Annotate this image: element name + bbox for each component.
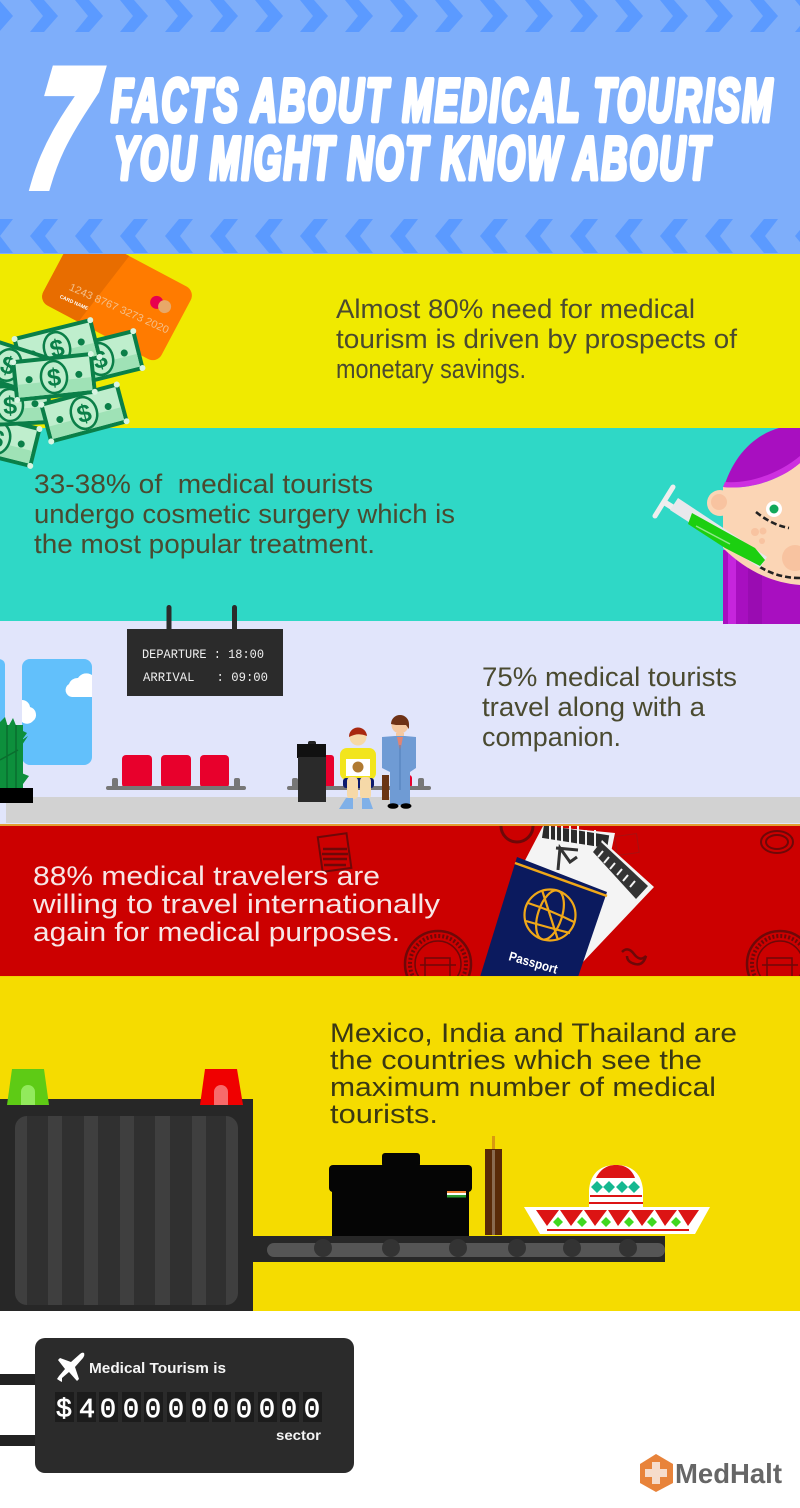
digit counter: 0 xyxy=(100,1396,116,1426)
digit counter: 0 xyxy=(145,1396,161,1426)
text: sector: sector xyxy=(276,1427,322,1443)
green beacon xyxy=(7,1069,49,1105)
passport xyxy=(480,857,607,977)
conveyor belt xyxy=(253,1236,665,1262)
text: destinations fact: tourists. xyxy=(330,1099,438,1129)
baggage scanner xyxy=(0,1069,253,1311)
departure board: ARRIVAL : 09:00 xyxy=(143,670,268,685)
panel: header xyxy=(0,0,800,254)
text: savings fact xyxy=(336,294,738,384)
text: companion fact: 75% medical tourists xyxy=(482,662,737,692)
logo wordmark: MedHalt xyxy=(675,1458,782,1489)
icon: airplane xyxy=(57,1353,84,1382)
device straps xyxy=(0,1374,36,1446)
icon: credit card: 1243 8767 3273 2020 xyxy=(67,281,171,336)
text: cosmetic surgery fact: undergo cosmetic surgery which is xyxy=(34,499,455,529)
panel: repeat travel xyxy=(0,826,800,977)
text: cosmetic surgery fact: 33-38% of medical tourists xyxy=(34,469,373,499)
bench: empty seats xyxy=(106,755,246,790)
departure board xyxy=(127,605,283,696)
text: companion fact: companion. xyxy=(482,722,621,752)
digit counter: 0 xyxy=(213,1396,229,1426)
text: repeat travel fact: again for medical purposes. xyxy=(33,917,400,947)
digit counter: 0 xyxy=(259,1396,275,1426)
text: repeat travel fact xyxy=(32,861,441,947)
text: companion fact: travel along with a xyxy=(482,692,706,722)
digit counter: 0 xyxy=(191,1396,207,1426)
icon: credit card xyxy=(42,254,192,360)
icon: hexagon cross xyxy=(640,1454,673,1492)
text: companion fact xyxy=(482,662,737,752)
black suitcase with flag xyxy=(329,1153,472,1236)
red beacon xyxy=(200,1069,243,1105)
passport stamps xyxy=(316,826,800,976)
title numeral 7: 7 xyxy=(20,36,108,221)
digit counter: 0 xyxy=(168,1396,184,1426)
digit counter: 0 xyxy=(123,1396,139,1426)
digit counter: 4 xyxy=(79,1396,95,1426)
text: destinations fact xyxy=(330,1018,737,1129)
plant xyxy=(0,717,33,803)
text: cosmetic surgery fact: the most popular treatment. xyxy=(34,529,375,559)
digit counter: 0 xyxy=(304,1396,320,1426)
digit counter xyxy=(55,1392,322,1426)
icon: credit card: CARD NAME xyxy=(59,294,89,312)
icon: banknotes xyxy=(0,316,146,470)
text: repeat travel fact: 88% medical travelers are xyxy=(33,861,380,891)
top chevron row xyxy=(0,0,800,32)
bottom chevron row xyxy=(0,219,800,253)
title line 2: YOU MIGHT NOT KNOW ABOUT xyxy=(114,126,712,192)
panel: waiting lounge xyxy=(0,605,800,826)
text: repeat travel fact: willing to travel internationally xyxy=(32,889,441,919)
windows with clouds xyxy=(0,659,92,766)
bench: occupied xyxy=(287,755,431,790)
panel: cosmetic surgery xyxy=(0,425,800,624)
text: cosmetic surgery fact xyxy=(34,469,455,559)
text: destinations fact: Mexico, India and Thailand are xyxy=(330,1018,737,1048)
text: savings fact: tourism is driven by prospects of xyxy=(336,324,738,354)
passport: Passport xyxy=(507,948,560,977)
panel: sector value device xyxy=(0,1338,354,1473)
digit counter: 0 xyxy=(281,1396,297,1426)
departure board: DEPARTURE : 18:00 xyxy=(142,647,264,662)
icon: face with syringe xyxy=(655,425,800,624)
digit counter: $ xyxy=(56,1396,72,1426)
text: medical tourism is: Medical Tourism is xyxy=(89,1360,226,1377)
suitcase xyxy=(297,741,326,802)
text: savings fact: Almost 80% need for medical xyxy=(336,294,695,324)
brown tube xyxy=(485,1136,502,1235)
sombrero xyxy=(524,1165,710,1234)
logo: MedHalt xyxy=(640,1454,782,1492)
digit counter: 0 xyxy=(236,1396,252,1426)
tickets xyxy=(520,825,654,963)
boy seated xyxy=(339,727,376,809)
title line 1: FACTS ABOUT MEDICAL TOURISM xyxy=(111,68,773,134)
text: destinations fact: the countries which see the xyxy=(330,1045,702,1075)
text: savings fact: monetary savings. xyxy=(336,354,526,384)
text: destinations fact: maximum number of medical xyxy=(330,1072,716,1102)
panel: monetary savings xyxy=(0,254,800,469)
panel: top destinations xyxy=(0,977,800,1311)
syringe xyxy=(655,487,767,568)
man standing xyxy=(382,715,416,809)
